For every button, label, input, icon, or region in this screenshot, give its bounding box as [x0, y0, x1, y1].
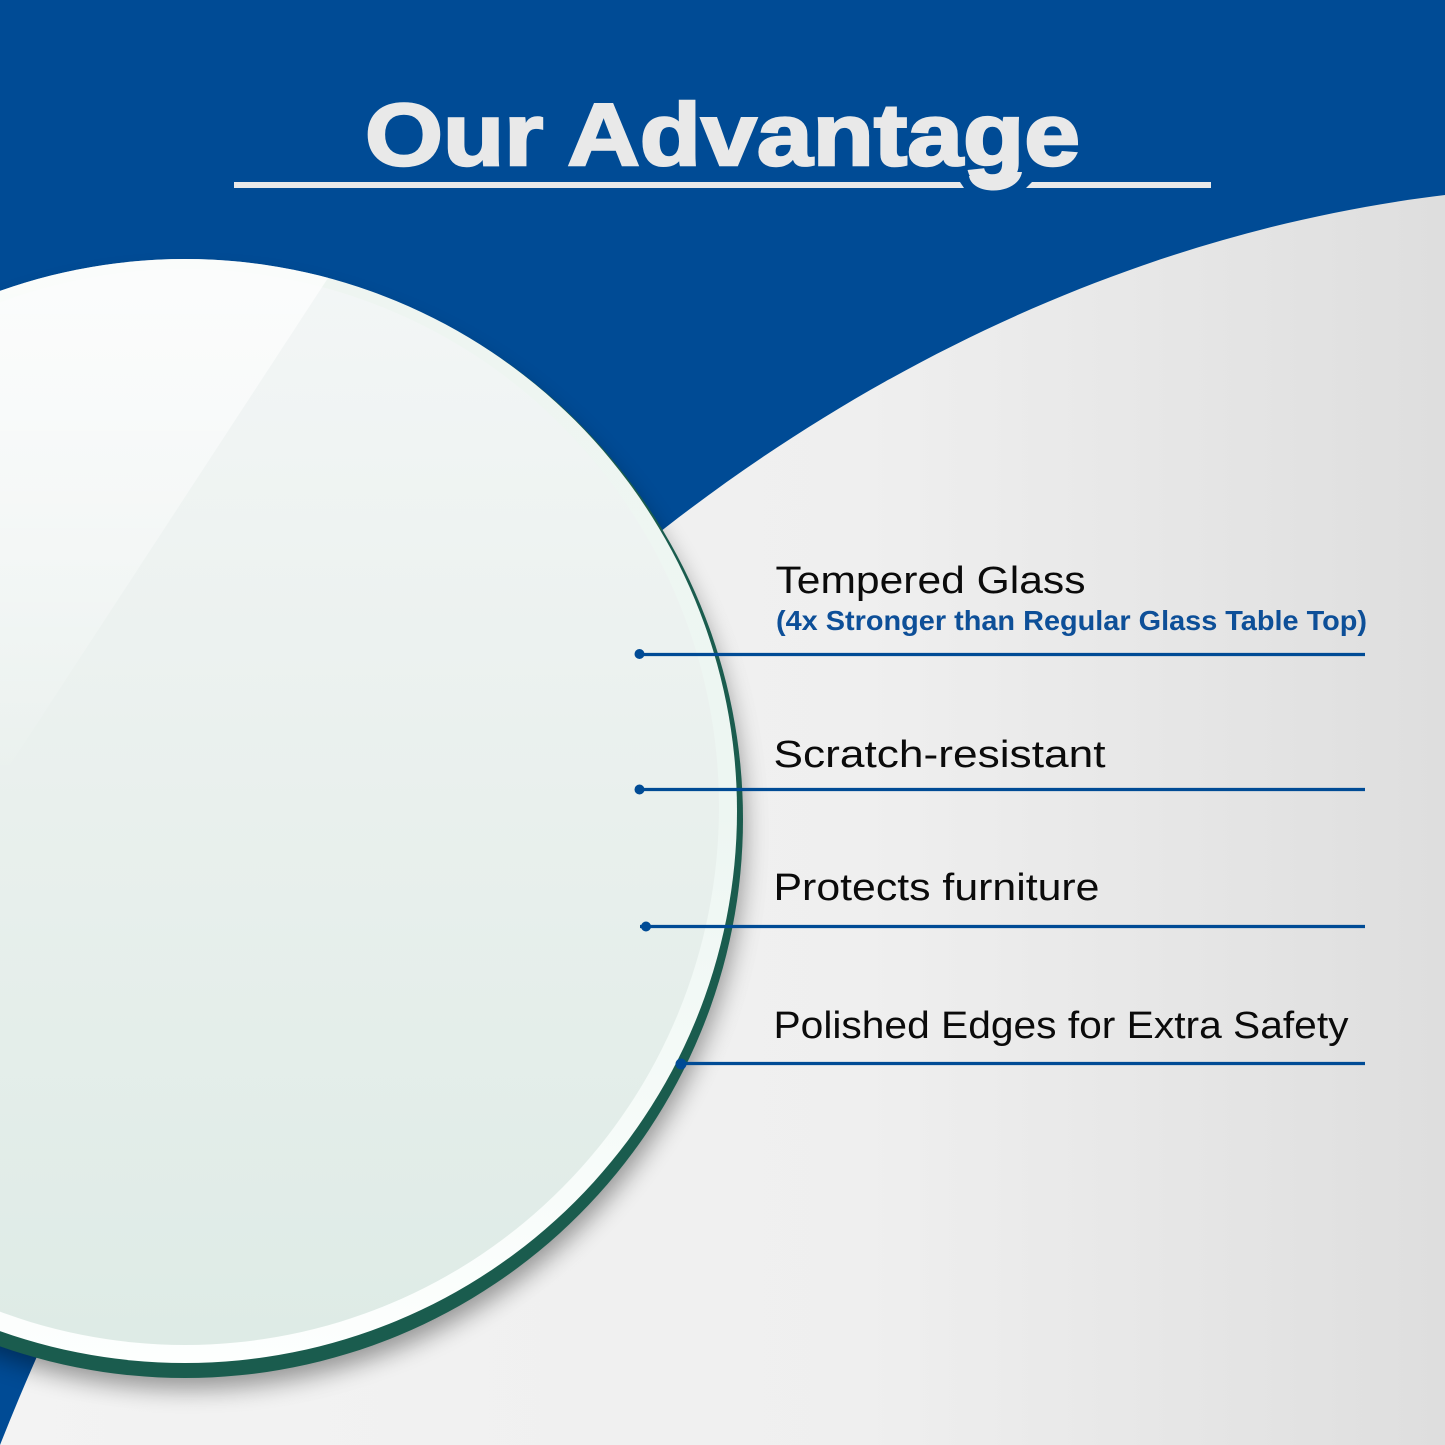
glass highlight	[0, 259, 328, 311]
title underline	[234, 182, 1211, 188]
callout: polished edges	[676, 1005, 1365, 1070]
leader dot	[634, 649, 644, 659]
leader dot	[634, 784, 644, 794]
glass polished rim	[0, 259, 737, 1363]
leader dot	[641, 922, 651, 932]
round glass table top	[0, 255, 744, 1389]
leader line	[639, 788, 1365, 791]
callout label: Polished Edges for Extra Safety	[774, 1005, 1348, 1047]
glass shadow	[0, 277, 744, 1389]
callout label: Protects furniture	[774, 867, 1100, 909]
glass dark green edge	[0, 260, 743, 1378]
leader line	[640, 925, 1365, 928]
heading: Our Advantage	[234, 85, 1211, 191]
title: Our Advantage	[365, 85, 1080, 184]
callout label: Tempered Glass	[776, 560, 1086, 602]
glass face	[0, 269, 719, 1345]
callout label: Scratch-resistant	[774, 734, 1106, 776]
callout: protects furniture	[640, 867, 1365, 932]
leader line	[639, 653, 1365, 656]
callout sub-label: (4x Stronger than Regular Glass Table Top)	[776, 605, 1367, 636]
title letter g tail	[969, 172, 1022, 191]
callout: scratch-resistant	[634, 734, 1365, 794]
callout: tempered glass	[634, 560, 1367, 659]
leader line	[681, 1062, 1365, 1065]
leader dot	[676, 1058, 686, 1070]
